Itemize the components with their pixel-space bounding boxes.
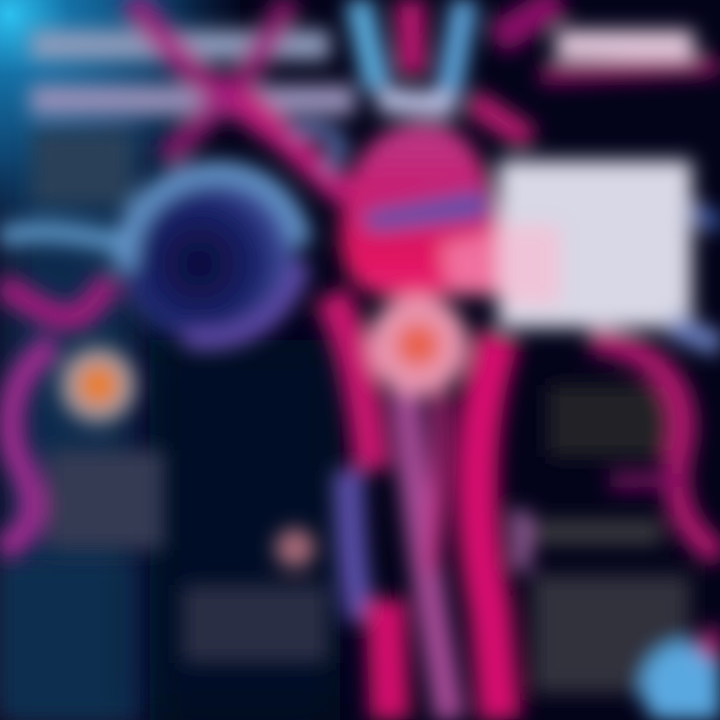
central ribbon body bbox=[340, 122, 520, 298]
title bbox=[30, 30, 355, 115]
ribbons: lower strands bbox=[330, 295, 522, 720]
ribbons: right strands bbox=[590, 210, 720, 555]
top right label bbox=[556, 30, 694, 60]
text block right lower bbox=[532, 520, 690, 693]
ribbons: blue vertical strands bbox=[358, 0, 465, 105]
icon: small badge bbox=[275, 528, 315, 568]
icon: central orange badge bbox=[368, 295, 468, 395]
text block left bbox=[48, 450, 164, 550]
ribbons: left strands bbox=[0, 232, 118, 550]
left text block bbox=[32, 130, 132, 205]
ribbons: top crossing strands bbox=[130, 0, 720, 195]
text block bottom centre bbox=[182, 585, 328, 663]
text block right upper bbox=[548, 385, 670, 457]
sphere bbox=[120, 167, 302, 343]
icon: blue orb bottom right bbox=[642, 625, 720, 720]
white panel bbox=[498, 160, 692, 328]
icon: orange badge left bbox=[60, 347, 136, 423]
